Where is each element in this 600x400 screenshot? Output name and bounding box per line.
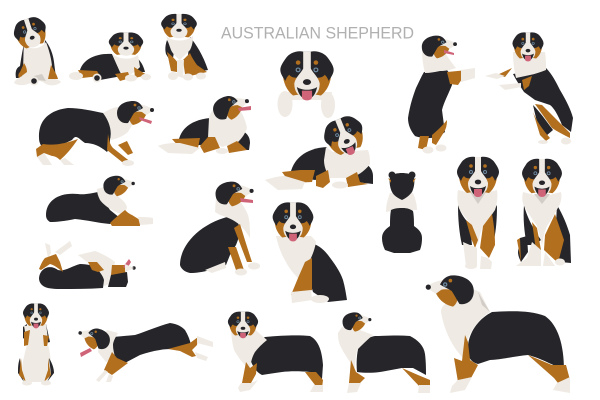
head [273,202,313,241]
head [426,275,474,307]
head [319,112,371,162]
icon: puppy lying [69,32,151,82]
head [117,101,154,125]
head [23,303,49,328]
icon: adult lying, face forward [265,112,373,190]
icon: large adult standing, head left [426,275,570,393]
icon: adult crouching, head right [36,101,154,166]
head [280,51,334,100]
icon: adult sitting, back view [382,172,422,253]
head [512,32,544,61]
head [76,325,112,352]
icon: adult lying, head up right [158,92,252,154]
icon: head and paws peeking [278,51,335,118]
title: AUSTRALIAN SHEPHERD [221,24,414,42]
head [161,14,197,38]
head [103,176,135,196]
icon: adult standing on hind legs, head right [408,36,475,154]
icon: puppy sitting front [161,14,208,80]
icon: adult lying, head right [46,176,153,226]
head [422,36,457,58]
head [343,312,371,332]
icon: adult standing, looking back right [338,312,430,393]
head [11,14,51,52]
head [228,312,258,338]
icon: adult sitting front [457,157,499,269]
icon: adult sitting three-quarter view [273,202,347,303]
icon: adult rolling on back [39,241,136,289]
head [109,32,143,56]
head [522,159,562,197]
icon: adult sitting side, head up right [180,182,260,276]
icon: adult standing on hind legs, face forward [485,32,573,145]
icon: adult standing, face forward [228,312,323,392]
head [216,182,254,206]
icon: puppy sitting, head tilted [11,14,61,85]
icon: adult leaping, head left [76,323,213,382]
icon: adult begging [18,303,54,386]
head [211,92,252,123]
icon: adult sitting front, turned [516,159,571,266]
head [457,157,499,197]
